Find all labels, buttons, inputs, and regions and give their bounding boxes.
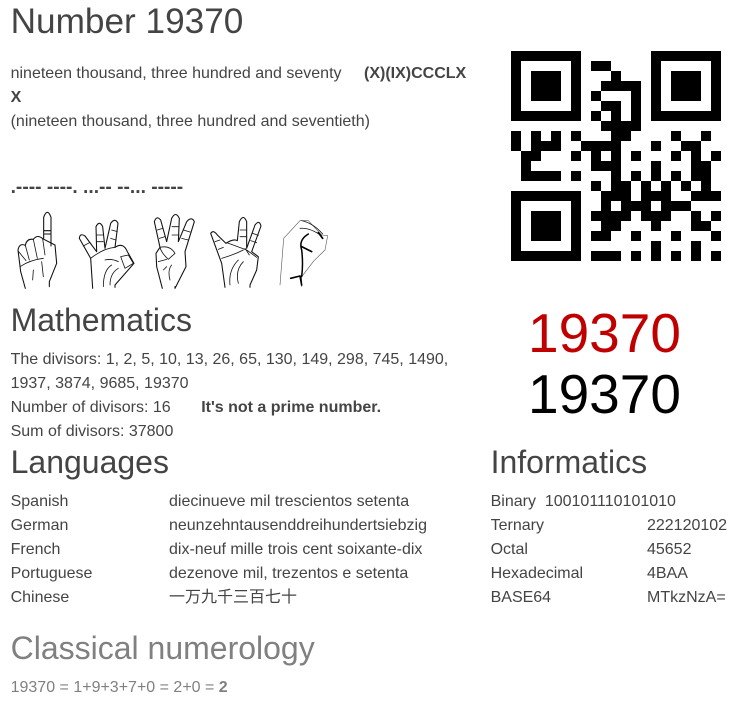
table: languages: dezenove mil, trezentos e setenta xyxy=(169,565,408,582)
heading: classical numerology: Classical numerology xyxy=(11,630,315,666)
table: languages: German xyxy=(11,517,68,534)
heading: informatics: Informatics xyxy=(491,444,647,480)
text block: divisors: 1937, 3874, 9685, 19370 xyxy=(11,375,189,392)
table: informatics: BASE64 xyxy=(491,589,551,606)
table: languages: Portuguese xyxy=(11,565,92,582)
text block: divisors xyxy=(11,351,448,440)
table: languages: dix-neuf mille trois cent soixante-dix xyxy=(169,541,422,558)
icon: hand zero fist xyxy=(280,221,328,287)
text block: divisors: Sum of divisors: 37800 xyxy=(11,423,173,440)
table: informatics xyxy=(491,493,727,606)
table: languages xyxy=(11,493,427,606)
icon: hand one xyxy=(18,212,57,288)
QR code xyxy=(511,51,721,261)
table: languages: Chinese xyxy=(11,589,69,606)
text block: divisors: The divisors: 1, 2, 5, 10, 13, 26, 65, 130, 149, 298, 745, 1490, xyxy=(11,351,448,368)
text block: number in words and roman numeral: nineteen thousand, three hundred and seventy xyxy=(11,65,342,82)
table: informatics: Ternary xyxy=(491,517,544,534)
text block: number in words and roman numeral: X xyxy=(11,89,21,106)
heading: languages: Languages xyxy=(11,444,169,480)
table: informatics: 4BAA xyxy=(647,565,688,582)
text block: number in words and roman numeral xyxy=(10,65,466,130)
table: languages: Spanish xyxy=(11,493,68,510)
table: informatics: Octal xyxy=(491,541,528,558)
text: numerology sum: 19370 = 1+9+3+7+0 = 2+0 = 2 xyxy=(11,679,228,696)
big number black: 19370 xyxy=(528,363,681,425)
heading: mathematics: Mathematics xyxy=(11,302,192,338)
big number red: 19370 xyxy=(528,302,681,364)
morse code: .---- ----. ...-- --... ----- xyxy=(11,177,183,198)
table: informatics: 222120102 xyxy=(647,517,727,534)
table: languages: neunzehntausenddreihundertsiebzig xyxy=(169,517,427,534)
title: Number 19370 xyxy=(11,2,243,41)
text block: divisors: Number of divisors: 16 xyxy=(11,399,171,416)
icon: hand three with ring and pinky xyxy=(79,220,134,288)
icon: hand three fingers crossed thumb xyxy=(211,218,261,287)
table: informatics: MTkzNzA= xyxy=(647,589,726,606)
text block: divisors: It's not a prime number. xyxy=(201,399,381,416)
icon: hand three fingers xyxy=(154,214,194,288)
table: informatics: Hexadecimal xyxy=(491,565,583,582)
table: languages: diecinueve mil trescientos setenta xyxy=(169,493,409,510)
icon: sign language hands xyxy=(18,212,328,289)
text block: number in words and roman numeral: (X)(IX)CCCLX xyxy=(364,65,466,82)
text block: number in words and roman numeral: (nineteen thousand, three hundred and seventieth) xyxy=(11,113,370,130)
table: informatics: Binary 100101110101010 xyxy=(491,493,676,510)
table: informatics: 45652 xyxy=(647,541,691,558)
table: languages: 一万九千三百七十 xyxy=(169,589,297,606)
table: languages: French xyxy=(11,541,60,558)
